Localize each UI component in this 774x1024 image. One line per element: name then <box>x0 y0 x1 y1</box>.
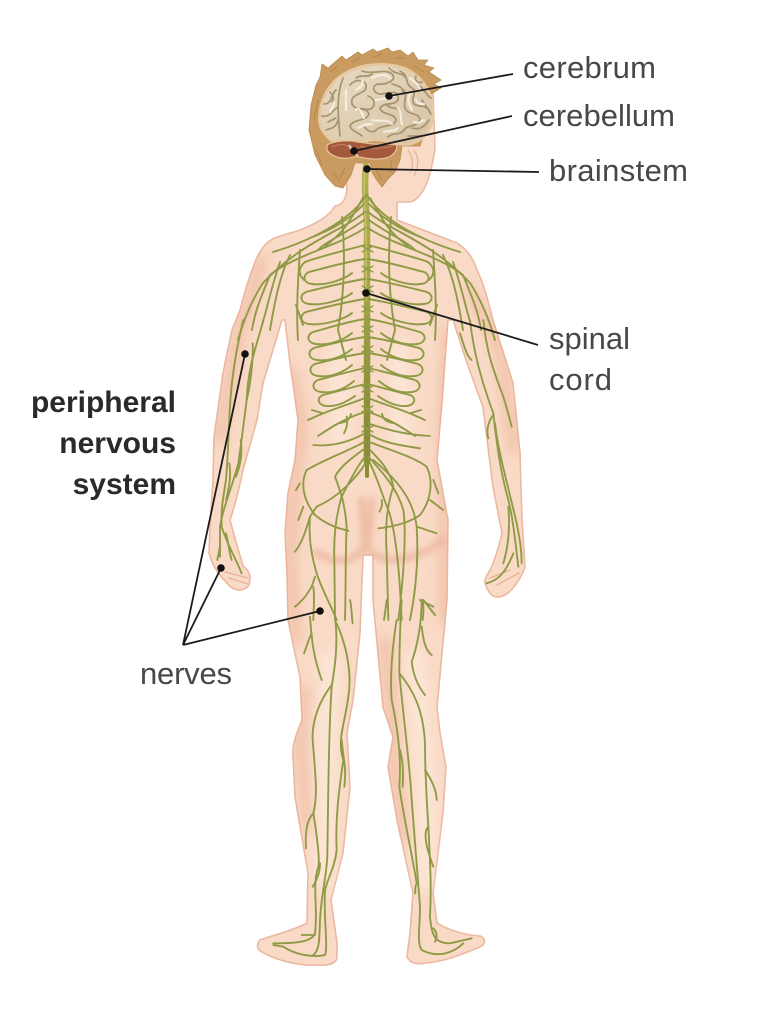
label: cerebellum: cerebellum <box>523 98 675 133</box>
head: hair <box>309 48 441 188</box>
head: ear <box>408 150 418 176</box>
infographic: human nervous system, back view <box>33 48 686 966</box>
leader line: cerebellum <box>350 116 512 155</box>
heading: peripheral nervous system: peripheral <box>31 386 176 419</box>
label: cerebrum: cerebrum <box>523 50 656 85</box>
brain: cerebellum <box>327 141 397 159</box>
nerves: legs and feet <box>273 600 472 956</box>
nerves: right arm <box>460 320 522 583</box>
leader line: brainstem <box>363 165 539 173</box>
leader lines: nerves <box>183 350 324 645</box>
label: brainstem: brainstem <box>549 153 688 188</box>
leader line: spinal cord <box>362 289 538 345</box>
label: spinal cord: spinal <box>549 321 630 356</box>
label: spinal cord: cord <box>549 362 612 397</box>
heading: peripheral nervous system: system <box>73 468 176 501</box>
heading: peripheral nervous system: nervous <box>59 427 176 460</box>
figure: child's body silhouette <box>209 60 525 965</box>
spinal cord <box>362 166 373 476</box>
nerves: lower trunk and pelvis <box>295 417 443 620</box>
brain: cerebrum <box>319 64 433 144</box>
body shading <box>220 260 519 880</box>
leader line: cerebrum <box>385 74 513 100</box>
label: nerves: nerves <box>140 656 232 691</box>
nerves: mirrored trunk branches, right side <box>367 195 495 436</box>
nerves: trunk ribs and upper branches, left side <box>238 195 366 436</box>
nerves: left arm <box>217 320 263 573</box>
